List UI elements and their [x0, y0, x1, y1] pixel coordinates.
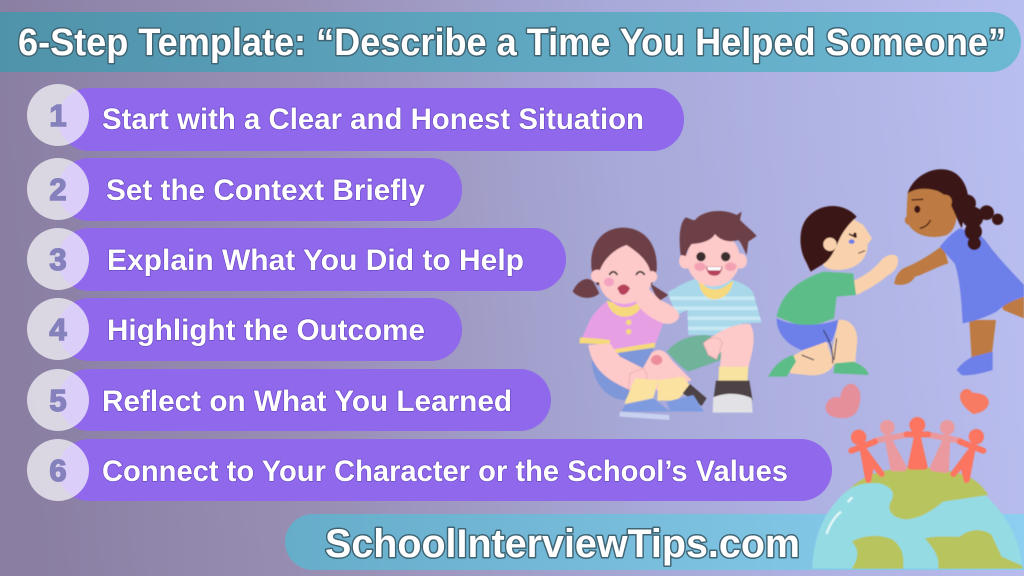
step 1: Start with a Clear and Honest Situation	[102, 103, 644, 136]
step 2: 2	[49, 172, 67, 207]
step 3: Explain What You Did to Help	[107, 244, 524, 277]
paper people chain	[851, 420, 983, 480]
illustration: globe with paper people	[812, 420, 1022, 569]
illustration: crying girl and comforting boy	[573, 211, 763, 420]
step 6	[27, 439, 832, 501]
helping child	[894, 169, 1024, 375]
step 3	[27, 228, 566, 291]
heart: pink	[826, 384, 860, 418]
boy	[667, 211, 763, 413]
step 5: Reflect on What You Learned	[102, 385, 512, 418]
step 5: 5	[49, 383, 67, 418]
step 1	[27, 84, 684, 151]
website banner	[285, 514, 1024, 570]
step 2	[27, 158, 462, 221]
step 1: 1	[49, 98, 67, 133]
website text: SchoolInterviewTips.com	[325, 522, 800, 566]
coral figures	[851, 420, 983, 480]
heart: coral	[960, 389, 989, 414]
step 6: Connect to Your Character or the School’s Values	[102, 455, 788, 488]
illustration: two children reaching out	[768, 169, 1024, 418]
kneeling child	[768, 206, 898, 377]
step 2: Set the Context Briefly	[106, 174, 425, 207]
step 5	[27, 369, 551, 431]
step 6: 6	[49, 453, 67, 488]
step 3: 3	[49, 242, 67, 277]
globe	[812, 467, 1022, 569]
step 4: 4	[49, 312, 67, 347]
step 4: Highlight the Outcome	[107, 314, 425, 347]
step 4	[27, 298, 462, 361]
girl	[573, 228, 707, 420]
pink figures	[875, 423, 960, 470]
title banner	[0, 12, 1021, 72]
